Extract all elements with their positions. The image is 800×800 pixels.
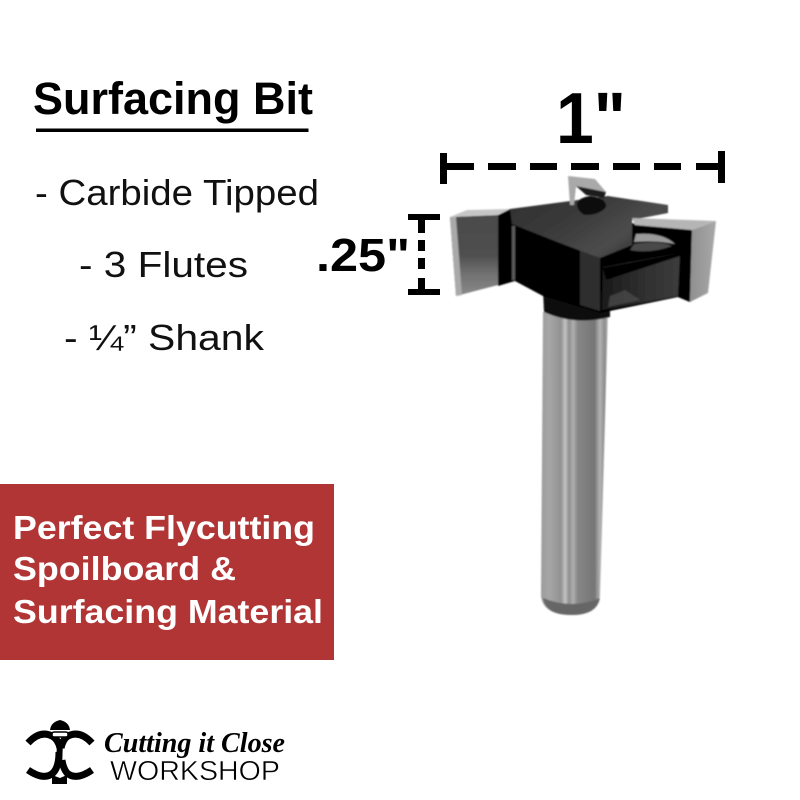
feature: flutes: - 3 Flutes xyxy=(79,244,248,285)
callout: uses xyxy=(0,484,334,660)
top face xyxy=(510,196,668,258)
feature list xyxy=(35,172,319,358)
right front face xyxy=(602,253,680,310)
left edge highlight xyxy=(512,226,515,280)
shank xyxy=(541,312,608,615)
body xyxy=(498,209,692,313)
logo workshop: WORKSHOP xyxy=(110,755,280,786)
hard hat and goggles xyxy=(50,720,70,784)
feature: carbide tipped: - Carbide Tipped xyxy=(35,172,319,213)
title: Surfacing Bit xyxy=(33,73,313,124)
right blade xyxy=(690,221,716,302)
height label: .25" xyxy=(316,229,410,281)
callout: uses: Spoilboard & xyxy=(13,550,236,587)
router bit photo xyxy=(450,176,716,615)
diameter dimension arrow xyxy=(440,151,725,184)
flute recess under right blade xyxy=(634,224,692,302)
callout: uses: Surfacing Material xyxy=(13,593,323,630)
logo icon xyxy=(28,734,92,776)
height dimension arrow xyxy=(408,214,440,295)
collar xyxy=(543,290,610,321)
diameter label: 1" xyxy=(556,79,626,159)
callout: uses: Perfect Flycutting xyxy=(13,509,315,546)
left blade xyxy=(450,215,498,296)
logo script: Cutting it Close xyxy=(104,728,285,759)
front corner face xyxy=(580,250,600,311)
logo xyxy=(28,720,285,786)
top blade xyxy=(568,176,606,205)
feature: shank: - ¼” Shank xyxy=(64,317,265,358)
